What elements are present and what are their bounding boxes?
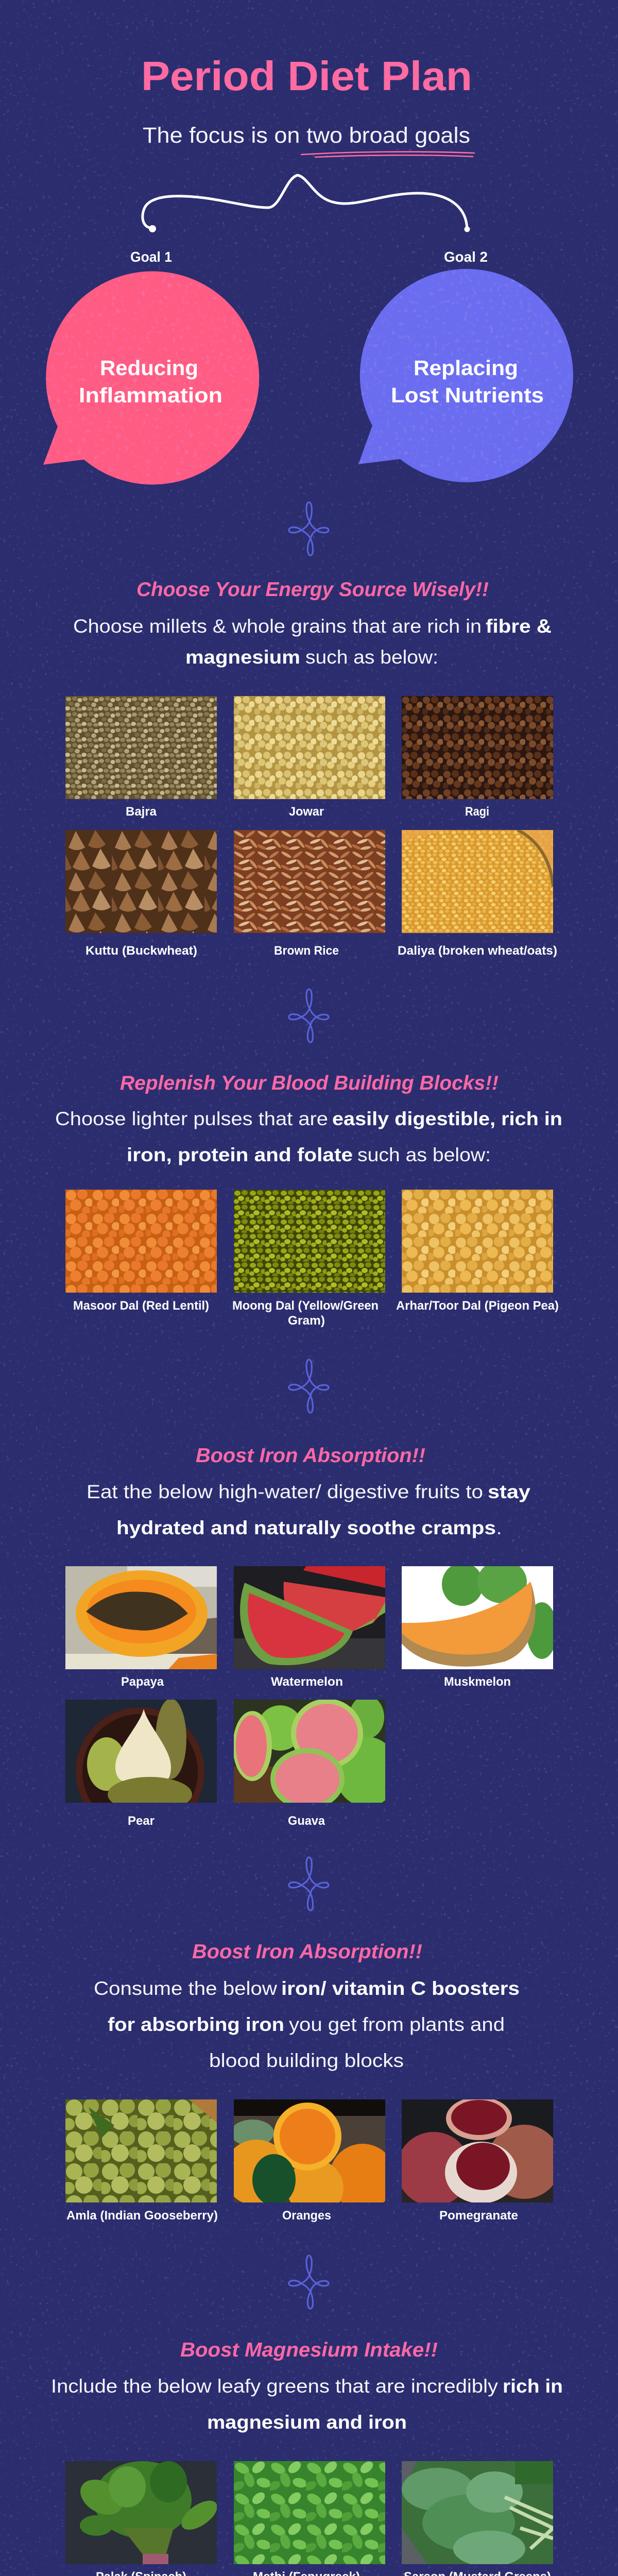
intro text [94,1978,520,2071]
photo: bajra [65,696,217,799]
goal 1 text: Reducing [100,356,198,380]
intro text: magnesium and iron [207,2412,407,2433]
photo: masoor dal [65,1190,217,1293]
label: Muskmelon [444,1675,511,1689]
divider ornament [289,989,329,1042]
blue speech bubble [358,269,573,482]
divider ornament [289,502,329,555]
divider ornament [289,1360,329,1413]
photo: moong dal [234,1190,385,1293]
panel: iron and vitamin C boosters [65,1941,561,2223]
divider ornament [289,2256,329,2309]
intro text: magnesium [185,647,300,668]
intro text [55,1108,562,1165]
photo: arhar dal [402,1190,553,1293]
intro text: hydrated and naturally soothe cramps [116,1517,496,1538]
photo: daliya [402,830,553,933]
panel: pulses [55,1072,562,1328]
heading: Choose Your Energy Source Wisely!! [136,579,489,601]
panel: hydrating fruits [65,1445,557,1836]
intro text: Choose lighter pulses that are [55,1108,328,1129]
label: Masoor Dal (Red Lentil) [73,1299,209,1313]
subtitle: The focus is on two broad goals [143,123,470,148]
photo: ragi [402,696,553,799]
label: Bajra [126,805,157,819]
intro text: easily digestible, rich in [332,1108,562,1129]
photo: kuttu [65,830,217,933]
goal 1 text [79,356,222,407]
title: Period Diet Plan [141,53,472,99]
intro text: for absorbing iron [108,2014,284,2035]
label: Pear [128,1814,154,1828]
goal 2 text: Lost Nutrients [391,383,544,407]
photo: pear [65,1700,217,1803]
intro text: blood building blocks [209,2050,404,2071]
goal 2 label: Goal 2 [444,249,488,265]
label: Watermelon [271,1675,343,1689]
intro text: such as below: [357,1144,491,1165]
intro text: . [496,1517,502,1538]
label: Moong Dal (Yellow/Green [232,1299,379,1313]
photo: methi [234,2461,385,2564]
heading: Boost Iron Absorption!! [192,1941,422,1963]
photo: sarson [402,2461,553,2567]
photo: brown rice [234,830,385,933]
photo: guava [234,1700,385,1803]
intro text: Include the below leafy greens that are incredibly [51,2376,499,2397]
photo: watermelon [234,1566,385,1669]
label: Brown Rice [274,944,339,958]
heading: Boost Magnesium Intake!! [180,2339,438,2361]
label: Daliya (broken wheat/oats) [398,944,557,958]
intro text [51,2376,563,2433]
intro text: iron, protein and folate [127,1144,353,1165]
panel: leafy greens [51,2339,563,2576]
photo: amla [65,2099,217,2202]
goal 2 text [391,356,544,407]
label [232,1299,379,1328]
pink speech bubble [43,272,259,485]
goal 1 [43,249,259,485]
goal 1 text: Inflammation [79,383,222,407]
label: Pomegranate [439,2209,518,2223]
photo: pomegranate [402,2099,553,2202]
intro text: iron/ vitamin C boosters [281,1978,520,1999]
intro text: you get from plants and [289,2014,505,2035]
goal 2 [358,249,573,482]
photo: oranges [234,2099,385,2202]
intro text [87,1481,530,1538]
photo: jowar [234,696,385,799]
label: Jowar [289,805,324,819]
brace arrow connecting the two goals [143,175,470,232]
panel: energy source grains [65,579,557,958]
intro text: stay [488,1481,530,1502]
label: Papaya [121,1675,164,1689]
intro text [73,616,552,668]
intro text: Eat the below high-water/ digestive fruits to [87,1481,483,1502]
photo: papaya [65,1566,217,1669]
divider ornament [289,1857,329,1910]
label: Oranges [282,2209,331,2223]
label: Amla (Indian Gooseberry) [66,2209,218,2223]
intro text: rich in [503,2376,563,2397]
intro text: Choose millets & whole grains that are rich in [73,616,482,637]
goal 2 text: Replacing [414,356,518,380]
label: Kuttu (Buckwheat) [85,944,197,958]
heading: Replenish Your Blood Building Blocks!! [120,1072,499,1094]
photo: palak [65,2461,222,2564]
intro text: such as below: [305,647,438,668]
photo: muskmelon [402,1566,553,1669]
label: Guava [288,1814,325,1828]
label: Ragi [465,805,489,819]
goal 1 label: Goal 1 [130,249,172,265]
label: Gram) [288,1314,325,1328]
heading: Boost Iron Absorption!! [196,1445,425,1467]
label: Arhar/Toor Dal (Pigeon Pea) [396,1299,559,1313]
intro text: fibre & [486,616,552,637]
pink hand-drawn underline [301,152,474,157]
intro text: Consume the below [94,1978,277,1999]
